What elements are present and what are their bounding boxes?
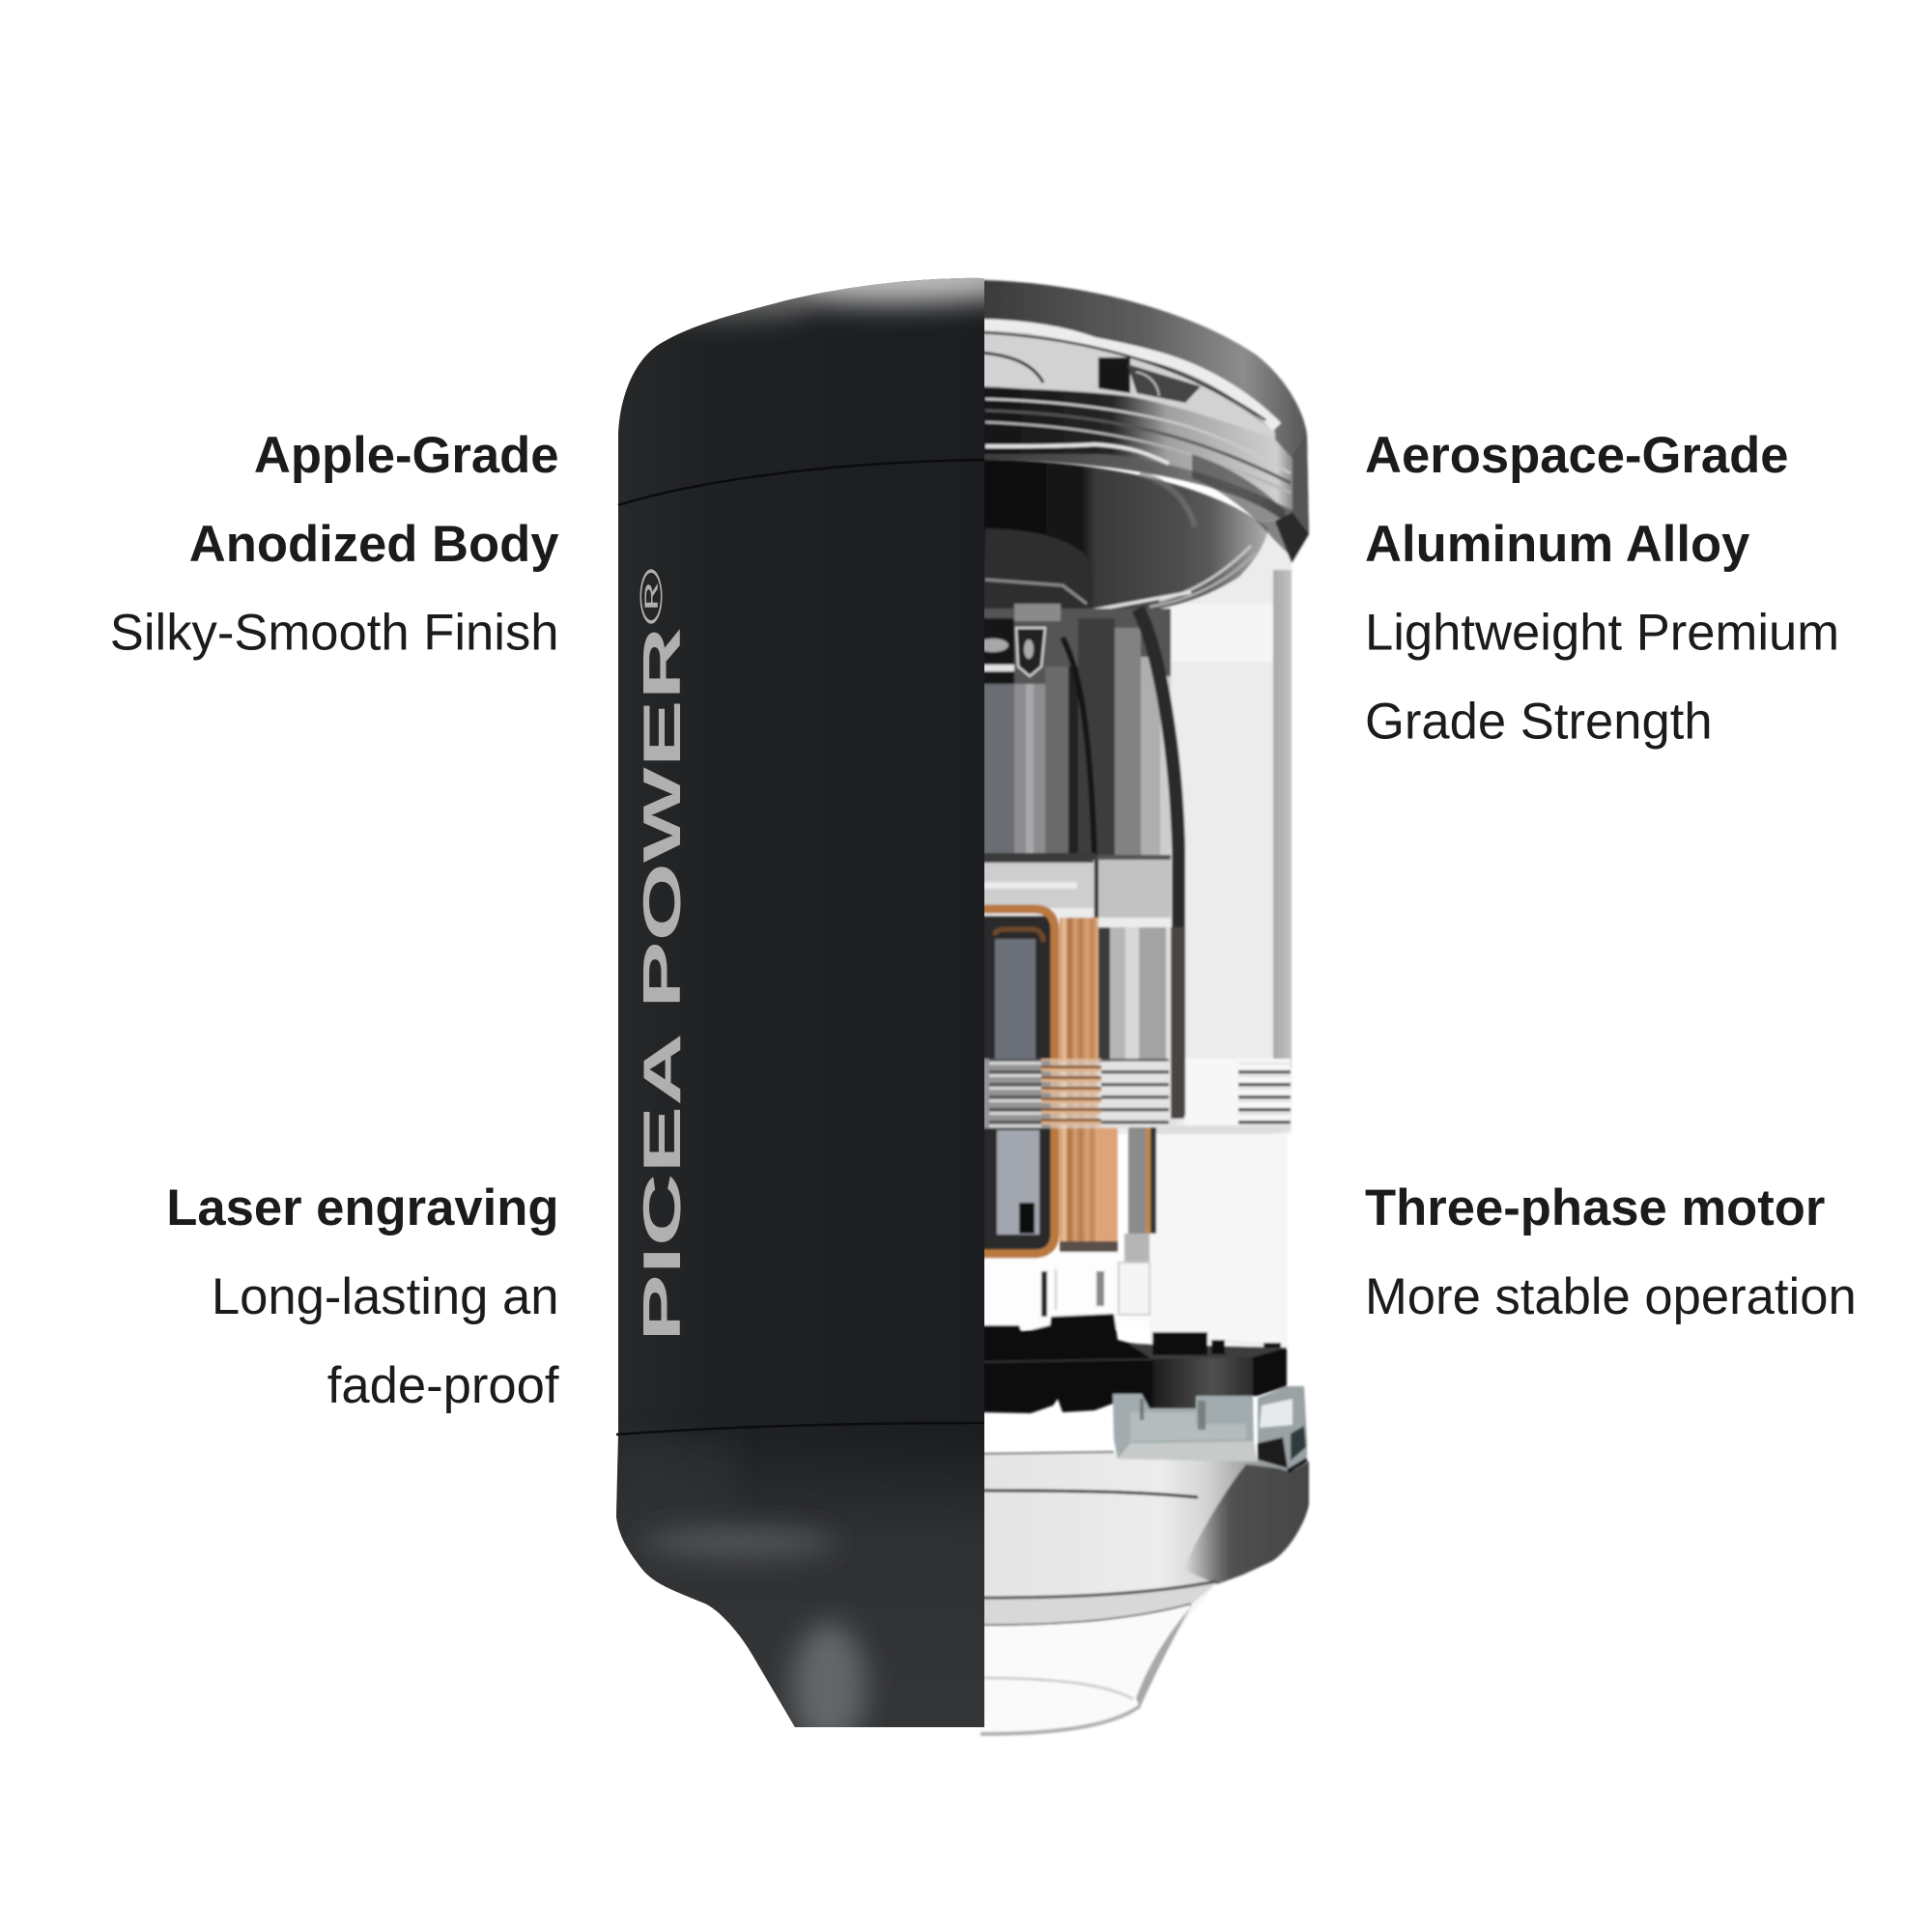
- heading: Apple-Grade Anodized Body: [110, 427, 558, 661]
- heading: Aerospace-Grade Aluminum Alloy: Aluminum Alloy: [1365, 516, 1749, 573]
- heading: Laser engraving: Long-lasting an: [212, 1268, 558, 1325]
- heading: Apple-Grade Anodized Body: Anodized Body: [189, 516, 558, 573]
- surface highlights: [616, 278, 984, 1727]
- lower cap seam: [616, 1423, 984, 1435]
- motor stator column: [978, 604, 1171, 918]
- silver mounting bracket: [1113, 1394, 1258, 1462]
- black wire: [1138, 609, 1179, 1116]
- glass body: [980, 522, 1292, 1349]
- heading: Aerospace-Grade Aluminum Alloy: Lightweight Premium: [1365, 605, 1839, 661]
- lower glass bowl: [980, 1452, 1309, 1736]
- laser engraved logo: [632, 567, 692, 1342]
- product: transparent cutaway right half: [978, 280, 1309, 1736]
- upper cap seam: [618, 460, 984, 505]
- product: black anodized left half: [616, 278, 984, 1727]
- metal cap: [980, 280, 1309, 563]
- heading: Aerospace-Grade Aluminum Alloy: Grade Strength: [1365, 694, 1713, 750]
- heading: Three-phase motor: [1365, 1179, 1857, 1325]
- heading: Laser engraving: Laser engraving: [166, 1179, 558, 1236]
- heading: Apple-Grade Anodized Body: Silky-Smooth Finish: [110, 605, 558, 661]
- bottom nozzle lens: [980, 1605, 1191, 1736]
- vertical silver rod: [1119, 927, 1184, 1315]
- copper coil assembly: [980, 909, 1171, 1254]
- horizontal threads band: [980, 1059, 1291, 1128]
- laser engraved logo: ®: [634, 567, 668, 625]
- black circuit board: [980, 1314, 1287, 1413]
- heading: Laser engraving: fade-proof: [327, 1357, 559, 1414]
- heading: Aerospace-Grade Aluminum Alloy: [1365, 427, 1839, 750]
- metal clip: [1258, 1386, 1307, 1471]
- heading: Aerospace-Grade Aluminum Alloy: Aerospace-Grade: [1365, 427, 1788, 484]
- connector pins: [1041, 1269, 1104, 1317]
- laser engraved logo: PICEA POWER: [632, 627, 692, 1342]
- threaded ring: [980, 388, 1309, 534]
- heading: Three-phase motor: Three-phase motor: [1365, 1179, 1825, 1236]
- heading: Laser engraving: [166, 1179, 559, 1414]
- heading: Three-phase motor: More stable operation: [1365, 1268, 1857, 1325]
- dark glass bowl: [980, 454, 1309, 628]
- infographic canvas: [112, 278, 1853, 1737]
- heading: Apple-Grade Anodized Body: Apple-Grade: [254, 427, 558, 484]
